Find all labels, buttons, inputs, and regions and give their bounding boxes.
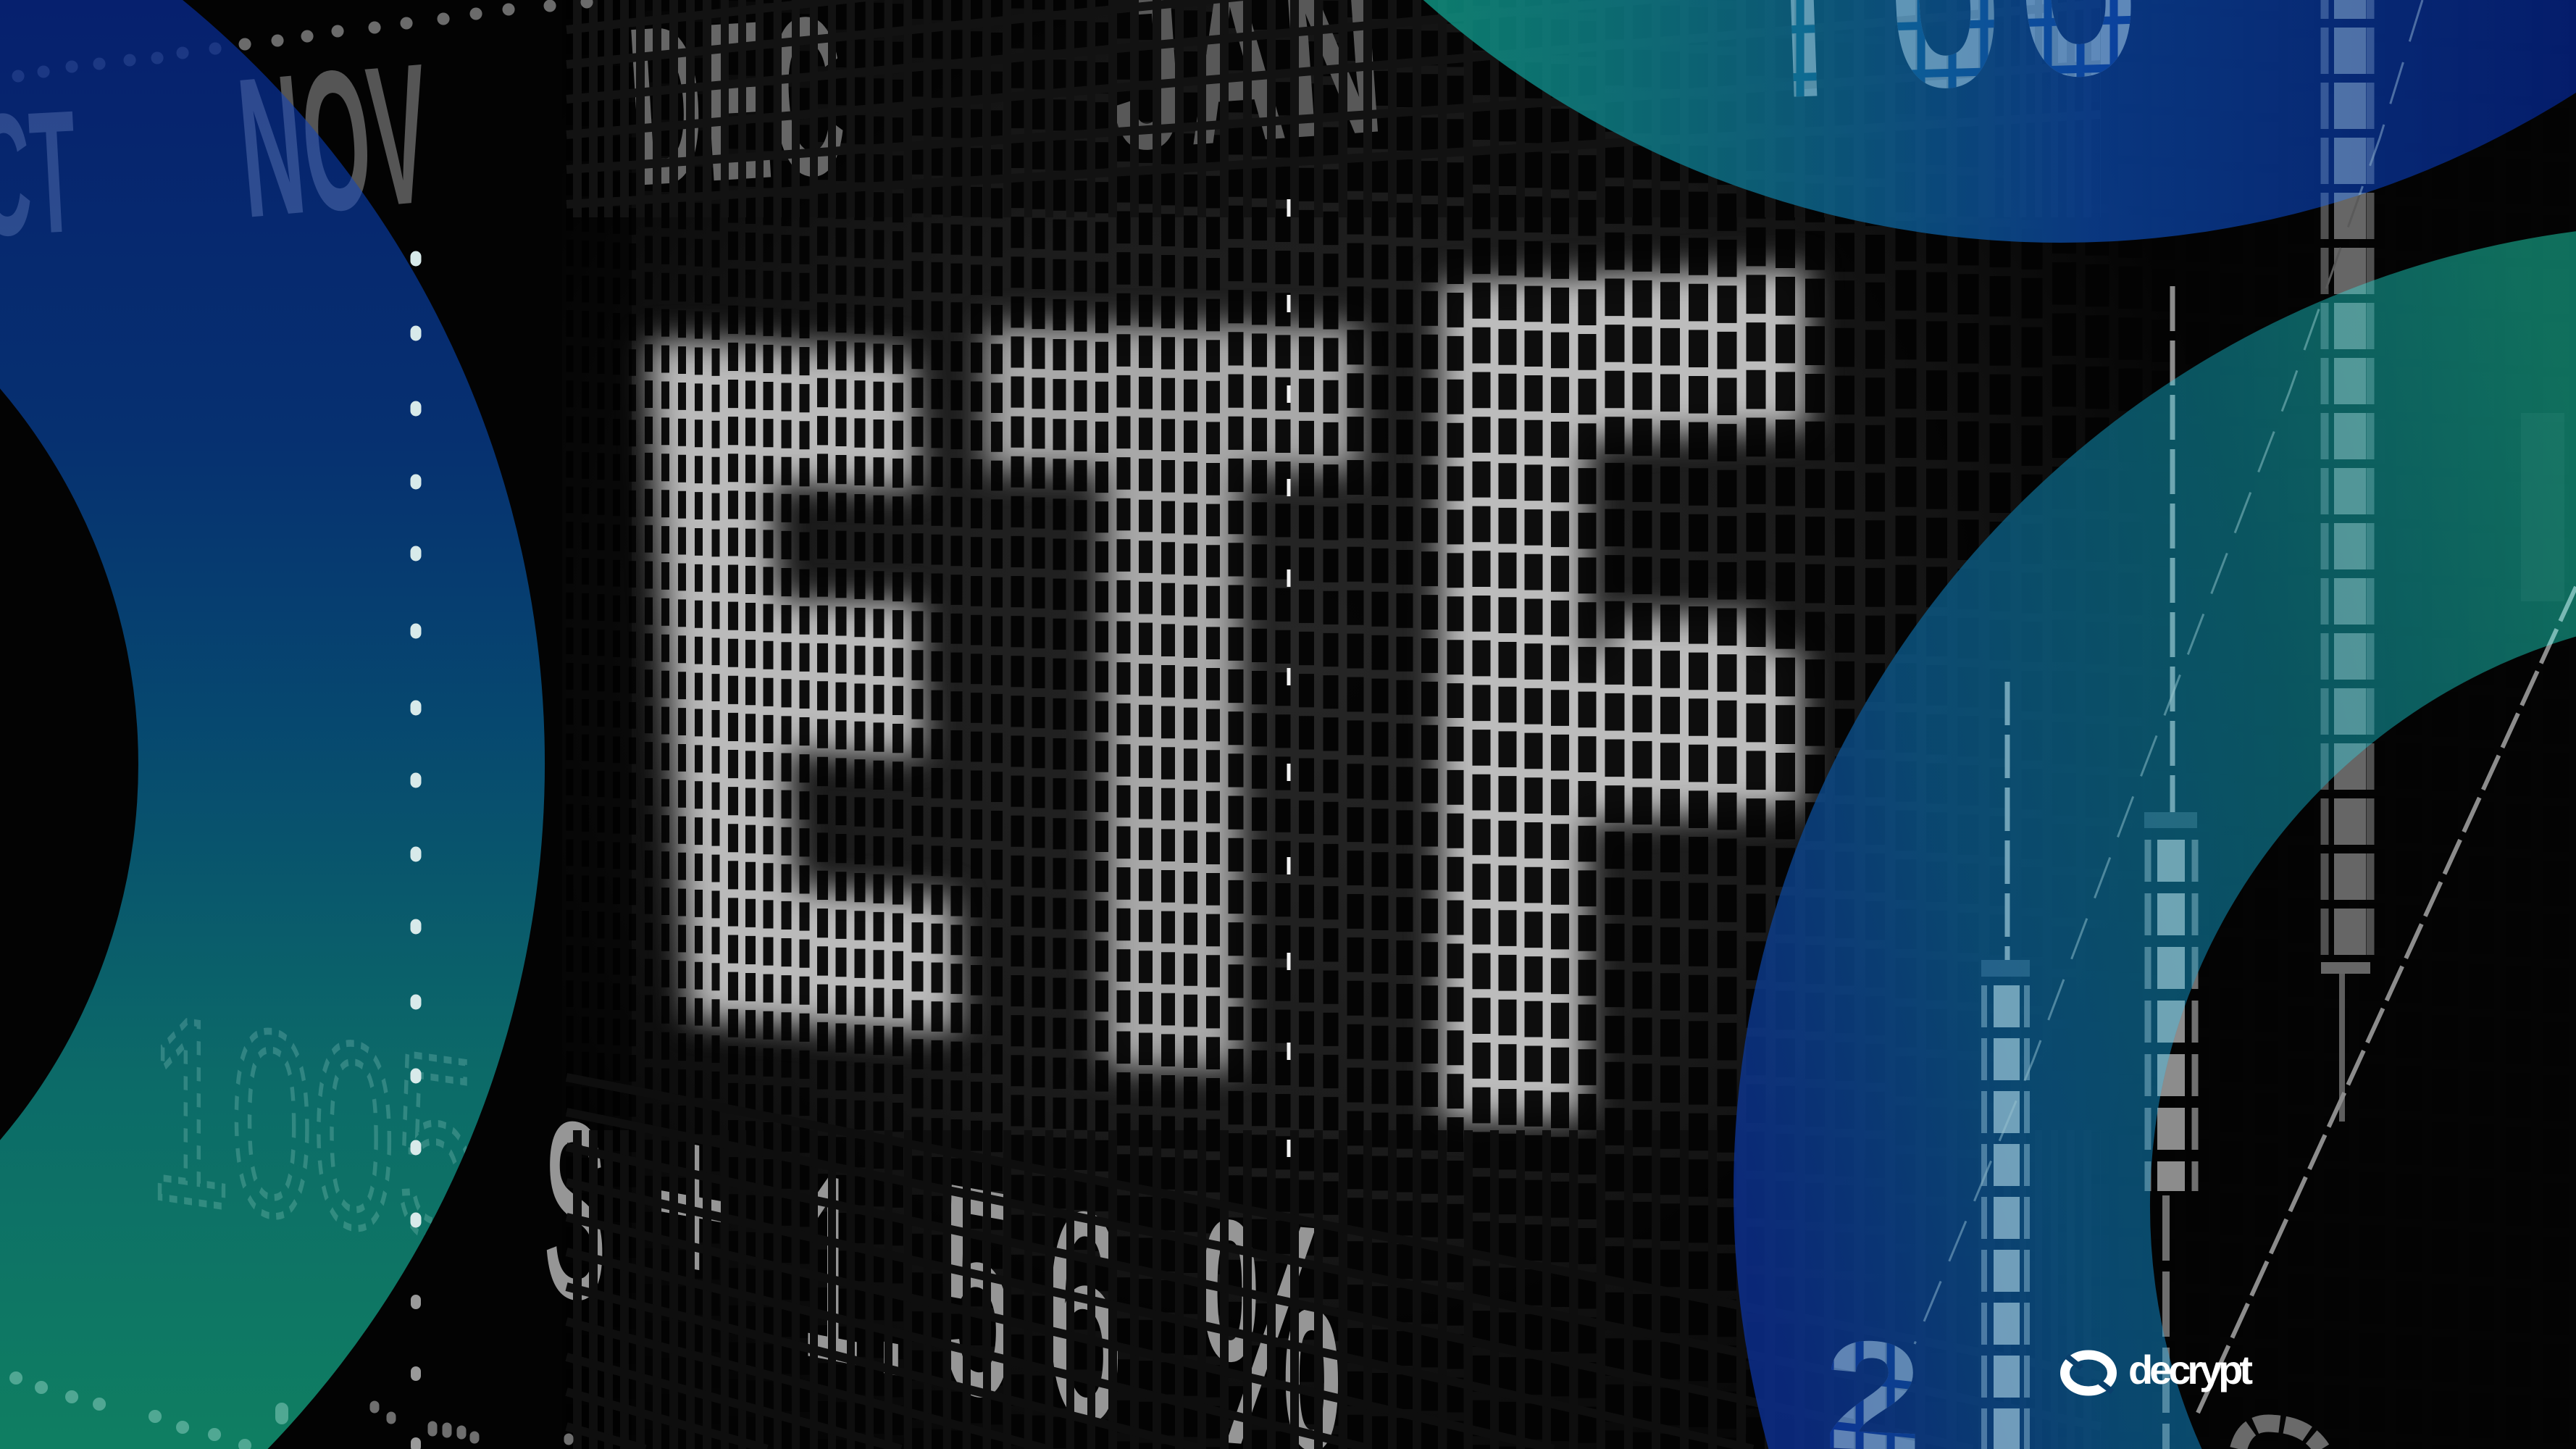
clipped letters at top right bbox=[1774, 0, 2151, 159]
LED cuts over tinted numeral, bottom bbox=[1811, 1326, 1941, 1449]
faint blob in right ring bbox=[2521, 413, 2564, 601]
logo wordmark: decrypt bbox=[2128, 1347, 2253, 1392]
month labels bbox=[0, 0, 1391, 277]
candlestick B bbox=[2144, 286, 2197, 1449]
left gradient ring bbox=[0, 0, 545, 1449]
candlestick C bbox=[2321, 0, 2370, 1122]
decrypt logo bbox=[2065, 1347, 2253, 1392]
LED grid base bbox=[562, 0, 2576, 1449]
dim left edge of the grid bbox=[562, 0, 632, 1449]
dots in left ring corner bbox=[16, 1378, 282, 1445]
big ETF letters behind the grid: F bbox=[1429, 28, 1800, 1356]
ticker reading: S +1.56 %: 1 bbox=[800, 1116, 861, 1420]
LED cuts over tinted letters, top bbox=[1782, 0, 2166, 101]
dotted vertical line left, below ring bbox=[411, 1300, 421, 1447]
ticker reading: S +1.56 %: S bbox=[543, 1068, 606, 1353]
month labels: NOV bbox=[230, 21, 438, 259]
month and letter tint: NOV bbox=[230, 21, 438, 259]
dark grid lines cutting top and bottom LED text bbox=[566, 0, 2101, 1449]
dotted arc at top bbox=[18, 2, 587, 76]
clipped arcs bottom right bbox=[2238, 1423, 2322, 1449]
dashed centre line bbox=[1287, 199, 1291, 1157]
ticker reading: S +1.56 %: + bbox=[656, 1059, 732, 1349]
big ETF letters behind the grid: T bbox=[1009, 115, 1335, 1273]
diagonal dashed trend line bright bbox=[2198, 587, 2576, 1413]
big ETF letters behind the grid bbox=[641, 28, 1800, 1356]
logo icon bbox=[2065, 1355, 2112, 1392]
candlestick A bbox=[1981, 682, 2030, 1449]
dotted vertical line left, inside ring bbox=[410, 256, 422, 1222]
ticker reading: S +1.56 %: . bbox=[873, 1134, 909, 1432]
right gradient ring bbox=[1734, 223, 2576, 1449]
ticker reading: S +1.56 % bbox=[543, 1059, 1342, 1449]
top right gradient circle bbox=[1102, 0, 2576, 243]
big ETF letters behind the grid: E bbox=[641, 151, 957, 1218]
candlestick tint bbox=[1915, 0, 2576, 1449]
grid holes bbox=[569, 0, 2556, 1449]
bottom left dim dots bbox=[375, 1406, 569, 1440]
diagonal dashed trend line faint bbox=[1915, 0, 2422, 1344]
faint ticker inside left ring: 1005 bbox=[149, 960, 477, 1300]
